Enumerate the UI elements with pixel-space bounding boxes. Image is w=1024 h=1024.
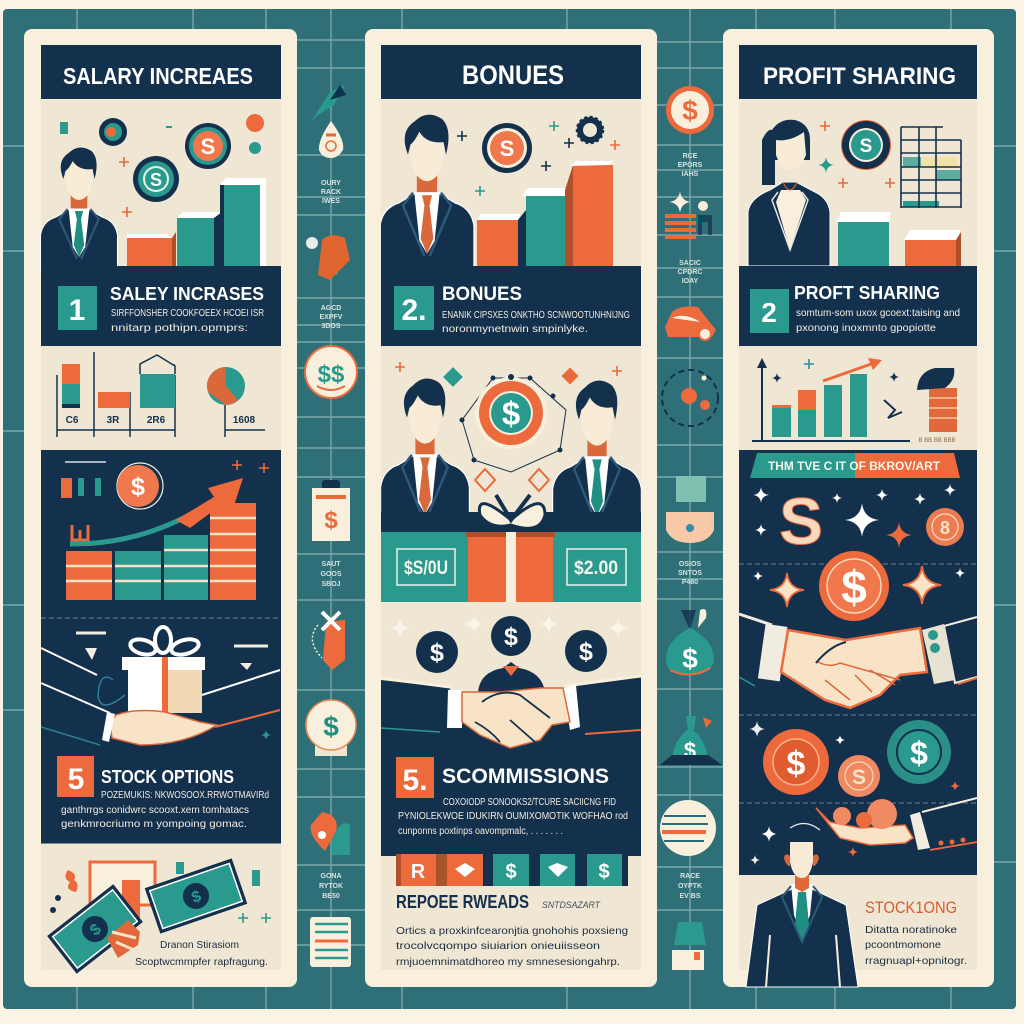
- heading: bonues: BONUES: [462, 60, 564, 90]
- panel: salary increases: [24, 29, 297, 987]
- illustration: banknotes: [47, 858, 271, 974]
- small text: [678, 561, 702, 586]
- panel: profit sharing: [723, 29, 994, 987]
- icon: small teal and orange coins: S: [150, 170, 162, 190]
- icon: clipboard: $: [324, 507, 338, 534]
- banner: THM TVE C IT OF BKROV/ART: [768, 459, 941, 473]
- small text: [319, 873, 343, 900]
- figures: two men: [381, 378, 641, 512]
- icon: money bag: $: [682, 643, 698, 674]
- small text: IOAY: [682, 278, 699, 285]
- section text: nnitarp pothipn.opmprs:: [111, 323, 248, 334]
- small text: GONA: [320, 873, 342, 880]
- section text: POZEMUKIS: NKWOSOOX.RRWOTMAVIRd: [101, 790, 269, 801]
- heading: profit sharing: [739, 45, 977, 99]
- small text: [321, 180, 341, 205]
- icon: speech bubbles: [311, 812, 350, 855]
- heading: salary increases: [41, 45, 281, 99]
- figure: woman in suit: [748, 120, 830, 266]
- section 2: [381, 266, 641, 346]
- bar chart: growth bars: [477, 161, 613, 266]
- price tag right: $2.00: [574, 558, 618, 579]
- small text: [678, 873, 702, 900]
- trend arrow: [70, 478, 243, 544]
- section text: [398, 797, 628, 837]
- icon: ribbon: [312, 612, 345, 670]
- icon: small teal and orange coins: S: [201, 134, 215, 159]
- icon: list card: [310, 917, 351, 967]
- chart: rising bars: [752, 358, 910, 441]
- price tag right: [567, 549, 626, 585]
- small text: BE50: [322, 893, 340, 900]
- number badge 5: 5: [68, 763, 84, 796]
- heading: profit sharing: PROFIT SHARING: [763, 63, 956, 90]
- number badge 5: [396, 757, 434, 798]
- number badge 1: [58, 286, 97, 330]
- section text: [796, 308, 960, 334]
- section text: rmjuoemnimatdhoreo my smnesesiongahrp.: [396, 956, 620, 968]
- coins row: $: [787, 745, 806, 783]
- icon: coin: $: [682, 95, 698, 126]
- section text: ENANIK CIPSXES ONKTHO SCNWOOTUNHNIJNG: [442, 310, 630, 321]
- section 2: [739, 266, 977, 346]
- icon: money bag: [666, 609, 714, 675]
- price tag left: $S/0U: [404, 558, 448, 579]
- number badge 2: 2.: [401, 294, 427, 327]
- section text: [396, 925, 628, 968]
- small text: RCE: [683, 153, 698, 160]
- section text: SIRFFONSHER COOKFOEEX HCOEI ISR: [111, 308, 264, 319]
- bottom strip: suits: [381, 512, 641, 532]
- small text: EPORS: [678, 162, 703, 169]
- section title: SCOMMISSIONS: [442, 765, 609, 788]
- small text: RACE: [680, 873, 700, 880]
- icon: dotted orbit: [662, 370, 718, 426]
- section text: trocolvcqompo siuiarion onieuiisseon: [396, 940, 600, 952]
- section text: somtum-som uxox gcoext:taising and: [796, 308, 960, 319]
- section text: [61, 790, 269, 830]
- icon: dollar medallion network: [395, 362, 622, 491]
- small text: RACK: [321, 189, 341, 196]
- small text: SAUT: [321, 561, 341, 568]
- icon: money bag with flag: [660, 716, 722, 765]
- bar chart: bars: [836, 212, 961, 266]
- number badge 5: 5.: [402, 764, 428, 797]
- handshake: [739, 614, 977, 708]
- icon: gift lantern: [672, 922, 706, 970]
- figure: man with orange tie: [380, 115, 474, 273]
- section title: STOCK OPTIONS: [101, 767, 234, 787]
- small text: [320, 561, 342, 588]
- section text: rragnuapl+opnitogr.: [865, 955, 967, 967]
- small text: IAHS: [682, 171, 699, 178]
- reward tiles: R: [411, 861, 426, 883]
- hand with coins: [750, 798, 977, 865]
- section text: ganthrrgs conidwrc scooxt.xem tomhatacs: [61, 805, 249, 816]
- icon: coin: [666, 86, 714, 134]
- reward tiles: [396, 854, 628, 886]
- small text: [678, 153, 703, 178]
- number badge 2: [394, 286, 434, 330]
- coins row: S: [852, 766, 866, 789]
- handshake: [381, 676, 641, 748]
- section title: SALEY INCRASES: [110, 284, 264, 304]
- section text: Ditatta noratinoke: [865, 924, 957, 936]
- section title: PROFT SHARING: [794, 283, 940, 303]
- icons: coin and gear: [457, 117, 620, 196]
- teal band: gift and prices: [381, 495, 641, 602]
- small text: OURY: [321, 180, 341, 187]
- icons: dollar balloons: [390, 614, 628, 673]
- navy block: share and stock: [739, 450, 977, 875]
- small text: OYPTK: [678, 883, 702, 890]
- coins row: [749, 720, 960, 797]
- figure: man at bottom: [746, 842, 858, 987]
- small text: AGCD: [321, 305, 341, 312]
- small text: IWES: [322, 198, 340, 205]
- icons: sparkles and large S: [753, 484, 964, 558]
- section text: [442, 310, 630, 335]
- icons: coin and gear: S: [500, 136, 514, 161]
- section text: noronmynetnwin smpinlyke.: [442, 324, 588, 335]
- small text: [320, 305, 343, 330]
- icon: pen: [311, 85, 346, 122]
- small text: 3DOS: [321, 323, 341, 330]
- heading: salary increases: SALARY INCREAES: [63, 63, 253, 89]
- section title: STOCK1ONG: [865, 898, 957, 917]
- chart: small bars and pie: [57, 352, 265, 437]
- icon: car: [665, 307, 716, 340]
- coin with sparkles: [753, 551, 965, 621]
- small text: OSIOS: [679, 561, 701, 568]
- section title: BONUES: [442, 284, 522, 305]
- small text: RYTOK: [319, 883, 343, 890]
- middle column: icons right: [660, 86, 722, 970]
- illustration: banknotes: $: [190, 888, 204, 907]
- chart: small bars and pie: 3R: [107, 415, 120, 426]
- icons: coin and sparkles: S: [860, 136, 872, 157]
- icon: stack and figure: [665, 191, 712, 237]
- icons: sparkles and large S: S: [779, 484, 823, 558]
- caption: Scoptwcmmpfer rapfragung.: [135, 956, 268, 968]
- price tag left: [397, 549, 455, 585]
- section text: genkmrocriumo m yompoing gomac.: [61, 819, 247, 830]
- section text: COXOIODP SONOOKS2/TCURE SACIICNG FID: [443, 797, 616, 808]
- section text: [111, 308, 264, 334]
- icon: clipboard: [312, 480, 350, 541]
- section text: cunponns poxtinps oavompmalc, . . . . . . .: [398, 826, 563, 837]
- section title: SNTDSAZART: [542, 900, 601, 910]
- small text: GOOS: [320, 571, 342, 578]
- icon: coin stack: [917, 368, 957, 444]
- section text: pxonong inoxmnto gpopiotte: [796, 323, 936, 334]
- icon: list circle: [660, 800, 716, 856]
- navy block: commissions: [381, 662, 641, 856]
- icons: dollar balloons: $: [504, 623, 518, 651]
- small text: SACIC: [679, 260, 701, 267]
- reward tiles: $: [598, 861, 610, 883]
- icon: shield and building: [666, 476, 714, 543]
- banner: [750, 453, 960, 478]
- icon: coin and tools: [61, 460, 269, 545]
- section text: [865, 924, 967, 967]
- number badge 2: 2: [761, 297, 777, 328]
- coin with sparkles: $: [841, 561, 867, 613]
- small text: EXPFV: [320, 314, 343, 321]
- small text: P480: [682, 579, 698, 586]
- icon: tools bundle: [306, 235, 350, 280]
- icons: sparkles and large S: 8: [940, 518, 950, 538]
- caption: Dranon Stirasiom: [160, 939, 239, 951]
- navy block: stock options: [41, 450, 281, 844]
- small text: EV BS: [679, 893, 701, 900]
- number badge 1: 1: [69, 294, 85, 327]
- figure: man in suit: [41, 147, 117, 272]
- illustration: hands holding gift: [41, 627, 280, 745]
- icon: dollar medallion network: $: [502, 395, 520, 432]
- chart: small bars and pie: 1608: [233, 415, 256, 426]
- icon: coin stack: B BB BB BBB: [918, 438, 956, 444]
- number badge 5: [57, 756, 94, 797]
- chart: small bars and pie: 2R6: [147, 415, 166, 426]
- gift box: [466, 495, 555, 602]
- icon: coin seal: [305, 346, 357, 398]
- icon: dollar lightbulb: $: [323, 711, 339, 742]
- bar chart: growth bars: [127, 178, 266, 266]
- stacked bars: [66, 503, 256, 600]
- heading: bonues: [381, 45, 641, 99]
- illustration: banknotes: $: [87, 921, 105, 940]
- icon: pin: [319, 121, 343, 158]
- reward tiles: $: [505, 861, 517, 883]
- middle column: icons left: [305, 85, 357, 967]
- section text: pcoontmomone: [865, 939, 941, 951]
- caption: [135, 939, 268, 968]
- icon: small teal and orange coins: [59, 114, 264, 217]
- coins row: $: [910, 735, 928, 771]
- icon: coin seal: $$: [318, 361, 345, 388]
- icons: coin and sparkles: [818, 120, 895, 188]
- icon: coin and tools: $: [131, 473, 145, 501]
- number badge 2: [750, 289, 789, 333]
- section text: PYNIOLEKWOE IDUKIRN OUMIXOMOTIK WOFHAO rod: [398, 811, 628, 822]
- section title: REPOEE RWEADS: [396, 892, 529, 912]
- small text: [678, 260, 702, 285]
- small text: SBOJ: [321, 581, 341, 588]
- small text: CPDRC: [678, 269, 702, 276]
- icons: dollar balloons: $: [430, 639, 444, 667]
- small text: SNTOS: [678, 570, 702, 577]
- chart: small bars and pie: C6: [66, 415, 79, 426]
- panel: bonuses: [365, 29, 657, 987]
- section text: Ortics a proxkinfcearonjtia gnohohis poxsieng: [396, 925, 628, 937]
- icons: dollar balloons: $: [579, 638, 593, 666]
- icon: money bag with flag: $: [684, 738, 696, 763]
- chart: table grid: [901, 127, 961, 208]
- section 1: [41, 266, 281, 346]
- icon: dollar lightbulb: [306, 700, 356, 756]
